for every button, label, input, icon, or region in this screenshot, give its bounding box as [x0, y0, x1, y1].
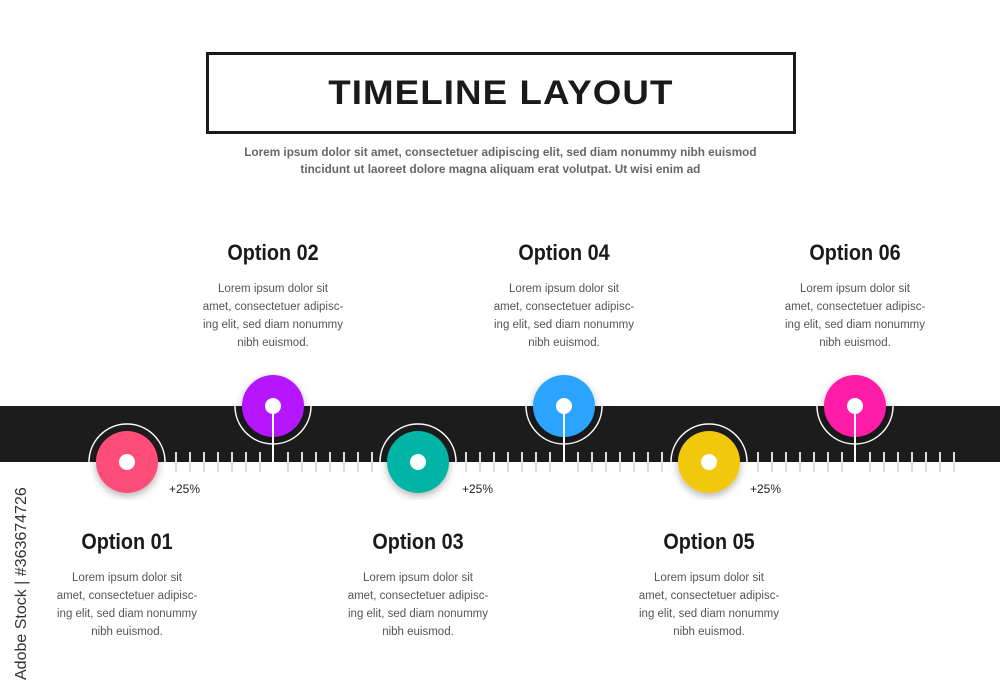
- option 01: Lorem ipsum dolor sit: [72, 572, 182, 584]
- option 01: ing elit, sed diam nonummy: [57, 608, 197, 620]
- option 05: ing elit, sed diam nonummy: [639, 608, 779, 620]
- subtitle: tincidunt ut laoreet dolore magna aliquam erat volutpat. Ut wisi enim ad: [300, 162, 700, 176]
- option 03: amet, consectetuer adipisc-: [348, 590, 488, 602]
- option 01: [57, 529, 197, 638]
- option 05: nibh euismod.: [673, 626, 745, 638]
- option 04: Lorem ipsum dolor sit: [509, 283, 619, 295]
- option 04: nibh euismod.: [528, 337, 600, 349]
- option 02: Option 02: [227, 240, 319, 265]
- option 02: ing elit, sed diam nonummy: [203, 319, 343, 331]
- option 02: amet, consectetuer adipisc-: [203, 301, 343, 313]
- option 06: nibh euismod.: [819, 337, 891, 349]
- option 01: amet, consectetuer adipisc-: [57, 590, 197, 602]
- option 05: [639, 529, 779, 638]
- option 05: Lorem ipsum dolor sit: [654, 572, 764, 584]
- option 05: Option 05: [663, 529, 755, 554]
- watermark side text: Adobe Stock | #363674726: [13, 487, 30, 680]
- timeline chart: [0, 374, 1000, 500]
- option 04: amet, consectetuer adipisc-: [494, 301, 634, 313]
- option 04: ing elit, sed diam nonummy: [494, 319, 634, 331]
- option 02: Lorem ipsum dolor sit: [218, 283, 328, 295]
- circles: [96, 375, 886, 493]
- option 06: ing elit, sed diam nonummy: [785, 319, 925, 331]
- timeline chart: +25%: [462, 482, 493, 496]
- option 04: [494, 240, 634, 349]
- title box: [206, 52, 796, 134]
- option 02: [203, 240, 343, 349]
- option 03: nibh euismod.: [382, 626, 454, 638]
- option 03: Option 03: [372, 529, 464, 554]
- timeline chart: +25%: [169, 482, 200, 496]
- option 06: Option 06: [809, 240, 901, 265]
- option 03: Lorem ipsum dolor sit: [363, 572, 473, 584]
- option 01: nibh euismod.: [91, 626, 163, 638]
- option 03: ing elit, sed diam nonummy: [348, 608, 488, 620]
- title box: TIMELINE LAYOUT: [328, 74, 674, 112]
- option 03: [348, 529, 488, 638]
- option 01: Option 01: [81, 529, 173, 554]
- option 04: Option 04: [518, 240, 610, 265]
- subtitle: Lorem ipsum dolor sit amet, consectetuer adipiscing elit, sed diam nonummy nibh euismod: [244, 145, 756, 159]
- option 02: nibh euismod.: [237, 337, 309, 349]
- option 06: amet, consectetuer adipisc-: [785, 301, 925, 313]
- option 06: Lorem ipsum dolor sit: [800, 283, 910, 295]
- subtitle: [244, 145, 756, 176]
- option 06: [785, 240, 925, 349]
- option 05: amet, consectetuer adipisc-: [639, 590, 779, 602]
- timeline chart: +25%: [750, 482, 781, 496]
